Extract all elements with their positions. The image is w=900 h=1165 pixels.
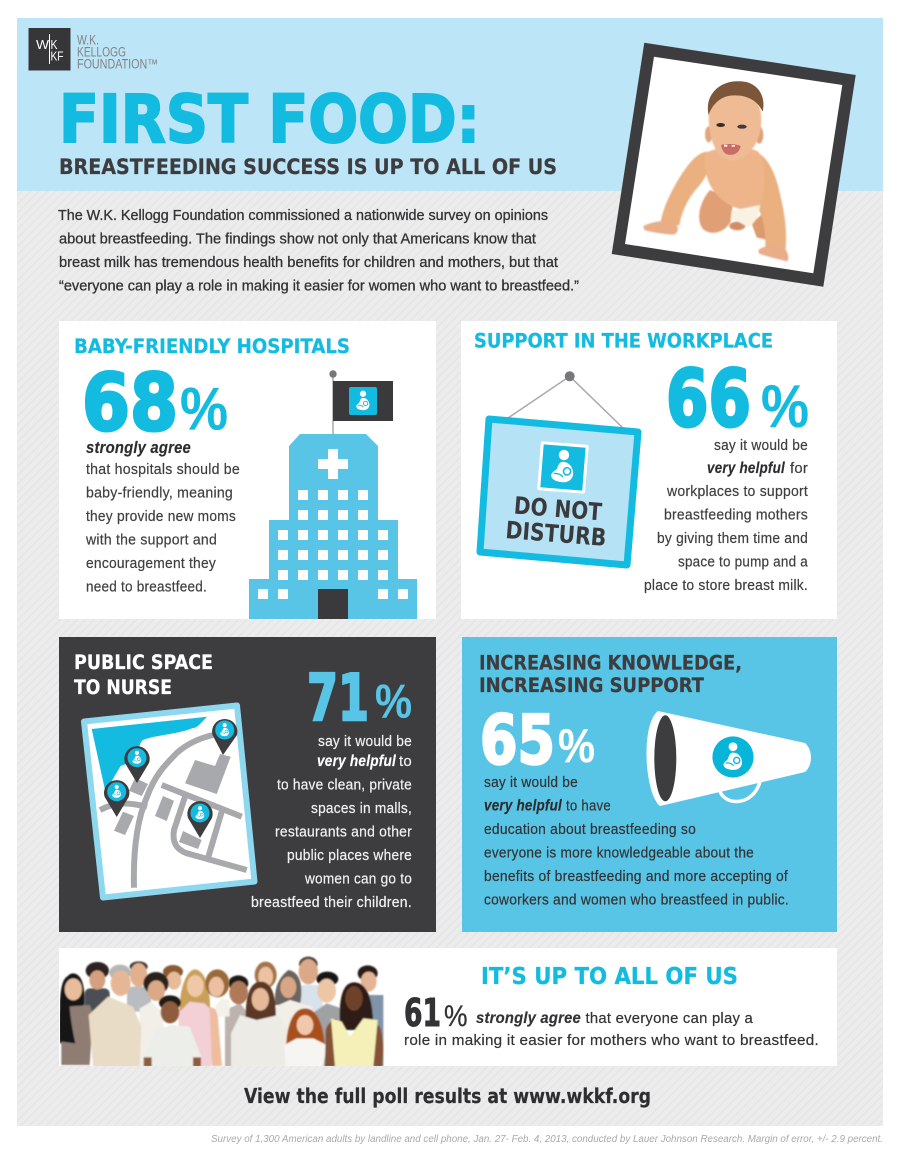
heading: public space to nurse: TO NURSE (74, 676, 172, 699)
heading: baby-friendly hospitals: BABY-FRIENDLY HOSPITALS (74, 335, 350, 358)
group photo of diverse people (59, 957, 383, 1067)
workplace text: say it would be (714, 437, 808, 454)
logo: W.K. Kellogg Foundation: W.K. (77, 32, 99, 48)
icon: do not disturb door sign: DO NOT (513, 492, 603, 526)
intro text: “everyone can play a role in making it easier for women who want to breastfeed.” (59, 278, 579, 294)
stat: 71%: 71 (307, 662, 369, 736)
hospital text: need to breastfeed. (86, 578, 207, 596)
public space text: restaurants and other (275, 824, 412, 840)
summary text: that everyone can play a (586, 1010, 753, 1027)
knowledge text: education about breastfeeding so (484, 821, 696, 838)
logo: W.K. Kellogg Foundation (28, 28, 158, 72)
icon: do not disturb door sign: DISTURB (504, 516, 607, 552)
icon: hospital building with flag (249, 370, 417, 619)
intro text: The W.K. Kellogg Foundation commissioned a nationwide survey on opinions (58, 208, 548, 224)
logo: W.K. Kellogg Foundation: KF (50, 48, 64, 64)
knowledge text: benefits of breastfeeding and more accepting of (484, 868, 789, 885)
public space text: spaces in malls, (311, 800, 412, 817)
icon: megaphone (646, 711, 811, 806)
subtitle: BREASTFEEDING SUCCESS IS UP TO ALL OF US (59, 155, 557, 180)
panel: increasing knowledge (462, 637, 837, 932)
workplace text: for (790, 460, 808, 477)
heading: support in the workplace: SUPPORT IN THE WORKPLACE (474, 330, 773, 352)
public space text (251, 733, 412, 911)
hospital text: baby-friendly, meaning (86, 484, 233, 502)
logo: W.K. Kellogg Foundation: KELLOGG (77, 44, 126, 60)
knowledge text: everyone is more knowledgeable about the (484, 844, 754, 862)
header band (17, 18, 883, 191)
workplace text: by giving them time and (657, 530, 808, 547)
intro text (58, 208, 579, 294)
heading: increasing knowledge, increasing support: INCREASING KNOWLEDGE, (479, 652, 742, 674)
intro text: breast milk has tremendous health benefits for children and mothers, but that (59, 255, 558, 271)
workplace text: workplaces to support (666, 483, 809, 500)
heading: public space to nurse (74, 651, 213, 699)
summary text: strongly agree (476, 1010, 581, 1027)
heading: increasing knowledge, increasing support: INCREASING SUPPORT (479, 674, 705, 697)
public space text: to have clean, private (277, 776, 412, 794)
baby photo in tilted frame (612, 43, 856, 287)
stat: 61%: 61 (404, 991, 441, 1035)
intro text: about breastfeeding. The findings show not only that Americans know that (59, 232, 536, 248)
public space text: breastfeed their children. (251, 894, 412, 911)
hospital text: strongly agree (86, 438, 191, 457)
workplace text: space to pump and a (678, 554, 808, 570)
public space text: say it would be (318, 733, 412, 750)
heading: public space to nurse: PUBLIC SPACE (74, 651, 213, 674)
workplace text (644, 437, 809, 594)
stat: 66%: 66 (666, 355, 751, 445)
hospital text: with the support and (85, 532, 217, 548)
workplace text: very helpful (707, 460, 785, 477)
footnote: Survey of 1,300 American adults by landline and cell phone, Jan. 27- Feb. 4, 2013, conducted by Lauer Johnson Research. Margin of error, +/- 2.9 percent. (211, 1134, 883, 1145)
icon: do not disturb door sign (480, 371, 638, 565)
stat: 71%: % (375, 674, 412, 728)
public space text: women can go to (304, 870, 412, 888)
knowledge text: very helpful (484, 798, 562, 814)
stat: 68%: % (180, 376, 228, 442)
stat: 65%: % (558, 719, 595, 772)
workplace text: breastfeeding mothers (664, 506, 808, 524)
call to action: View the full poll results at www.wkkf.org (244, 1084, 651, 1108)
stat: 66%: % (761, 373, 809, 440)
knowledge text (484, 774, 789, 908)
panel: baby-friendly hospitals (59, 321, 436, 619)
heading: it's up to all of us: IT’S UP TO ALL OF US (481, 964, 738, 990)
icon: city map with location pins (84, 706, 254, 898)
public space text: very helpful (317, 753, 396, 770)
panel: support in the workplace (461, 321, 837, 619)
summary text (404, 1010, 819, 1049)
hospital text: that hospitals should be (86, 461, 240, 478)
knowledge text: coworkers and women who breastfeed in public. (484, 892, 789, 908)
logo: W.K. Kellogg Foundation: FOUNDATION™ (77, 56, 158, 72)
hospital text: they provide new moms (86, 508, 236, 525)
panel: public space to nurse (59, 637, 436, 932)
summary text: role in making it easier for mothers who want to breastfeed. (404, 1032, 819, 1049)
title: FIRST FOOD: (59, 81, 480, 158)
logo: W.K. Kellogg Foundation: K (50, 37, 58, 52)
knowledge text: say it would be (484, 774, 578, 791)
hospital text (85, 438, 240, 596)
public space text: public places where (287, 847, 412, 864)
logo: W.K. Kellogg Foundation: W (36, 37, 50, 52)
stat: 61%: % (444, 1000, 468, 1033)
public space text: to (399, 753, 412, 770)
stat: 65%: 65 (480, 702, 555, 780)
panel: it's up to all of us (59, 948, 837, 1067)
hospital text: encouragement they (86, 555, 216, 572)
knowledge text: to have (566, 798, 611, 814)
heading: increasing knowledge, increasing support (479, 652, 742, 697)
workplace text: place to store breast milk. (644, 577, 808, 594)
stat: 68%: 68 (82, 359, 178, 449)
